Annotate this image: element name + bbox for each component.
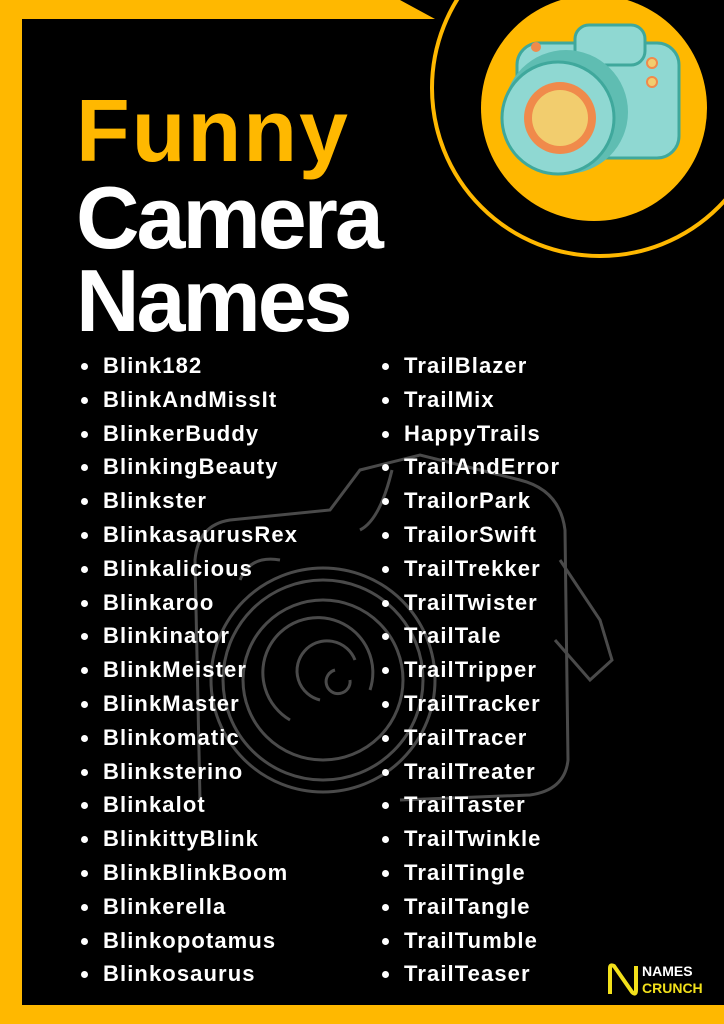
list: column 2: TrailTripper — [404, 657, 537, 682]
list: column 2: TrailTreater — [404, 759, 536, 784]
list: column 1: BlinkBlinkBoom — [103, 860, 288, 885]
list: column 2: TrailTwister — [404, 590, 538, 615]
title: Funny — [76, 81, 350, 180]
list: column 1: Blinkopotamus — [103, 928, 276, 953]
list: column 1: Blink182 — [103, 353, 202, 378]
list: column 1: Blinkalicious — [103, 556, 253, 581]
list: column 2: TrailTingle — [404, 860, 526, 885]
list: column 1: Blinkalot — [103, 792, 206, 817]
list: column 1: BlinkAndMissIt — [103, 387, 277, 412]
list: column 1: Blinkinator — [103, 623, 230, 648]
title: Names — [76, 251, 350, 350]
logo: names crunch: NAMES — [642, 963, 693, 979]
list: column 1: Blinkomatic — [103, 725, 240, 750]
list: column 2: TrailTumble — [404, 928, 538, 953]
list: column 1: BlinkerBuddy — [103, 421, 259, 446]
list: column 2: TrailTaster — [404, 792, 526, 817]
list: column 2: TrailorSwift — [404, 522, 537, 547]
list: column 1: Blinkaroo — [103, 590, 214, 615]
title — [76, 81, 384, 350]
logo: names crunch — [608, 963, 703, 996]
list: column 2: TrailTeaser — [404, 961, 531, 986]
list: column 1 — [81, 353, 298, 986]
list: column 1: BlinkasaurusRex — [103, 522, 298, 547]
list: column 2: TrailBlazer — [404, 353, 527, 378]
list: column 2: TrailTwinkle — [404, 826, 542, 851]
list: column 1: BlinkittyBlink — [103, 826, 259, 851]
list: column 2: TrailorPark — [404, 488, 531, 513]
list: column 1: BlinkMaster — [103, 691, 240, 716]
list: column 1: Blinkster — [103, 488, 207, 513]
icon: camera in yellow circle — [481, 0, 707, 221]
logo: names crunch: CRUNCH — [642, 980, 703, 996]
list: column 1: Blinksterino — [103, 759, 243, 784]
list: column 2: TrailTracker — [404, 691, 541, 716]
list: column 2: TrailTangle — [404, 894, 531, 919]
list: column 2: TrailTracer — [404, 725, 527, 750]
list: column 2: HappyTrails — [404, 421, 541, 446]
title: Camera — [76, 168, 381, 267]
list: column 1: Blinkosaurus — [103, 961, 256, 986]
list: column 2: TrailMix — [404, 387, 495, 412]
list: column 2: TrailAndError — [404, 454, 560, 479]
list: column 2: TrailTrekker — [404, 556, 541, 581]
list: column 1: BlinkMeister — [103, 657, 247, 682]
list: column 1: BlinkingBeauty — [103, 454, 279, 479]
list: column 1: Blinkerella — [103, 894, 226, 919]
list: column 2 — [382, 353, 560, 986]
list: column 2: TrailTale — [404, 623, 502, 648]
